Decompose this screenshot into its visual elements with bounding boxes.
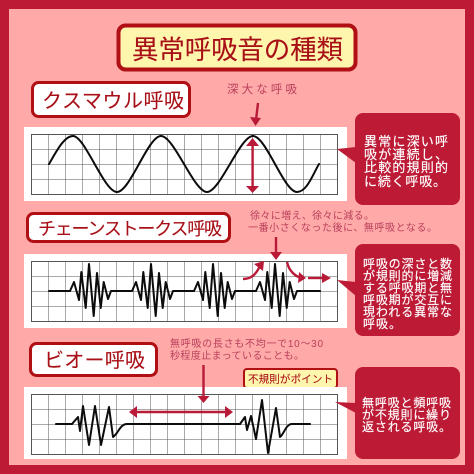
callout: Cheyne-Stokes description: 呼吸期が交互に <box>363 292 452 307</box>
title <box>118 26 356 70</box>
heading: Cheyne-Stokes <box>28 214 230 242</box>
heading: Biot <box>30 344 156 376</box>
callout: Kussmaul description: に続く呼吸。 <box>364 174 446 189</box>
callout: Cheyne-Stokes description: 呼吸。 <box>363 317 401 331</box>
callout: Kussmaul description: 吸が連続し、 <box>364 147 448 162</box>
callout: Cheyne-Stokes description <box>337 244 460 336</box>
arrow: decrescendo <box>287 262 306 283</box>
callout: Cheyne-Stokes description: する呼吸期と無 <box>363 280 452 295</box>
annotation: Cheyne-Stokes note: 徐々に増え、徐々に減る。 <box>250 209 374 222</box>
callout: Biot description: 無呼吸と頻呼吸 <box>362 395 451 410</box>
callout: Cheyne-Stokes description: 呼吸の深さと数 <box>363 256 452 271</box>
annotation: Biot note: 無呼吸の長さも不均一で10〜30 <box>170 337 323 350</box>
arrow: smallest point pointer <box>270 237 282 260</box>
callout: Cheyne-Stokes description: 現われる異常な <box>363 305 452 319</box>
tag: irregularity is the point: 不規則がポイント <box>248 372 333 386</box>
heading: Biot: ビオー呼吸 <box>44 349 145 372</box>
arrow: deep breathing pointer <box>250 103 261 126</box>
arrow: apnea span <box>129 406 233 418</box>
chart: Cheyne-Stokes waveform <box>24 254 347 328</box>
annotation: deep breathing: 深大な呼吸 <box>227 82 298 96</box>
callout: Biot description: が不規則に繰り <box>362 407 451 422</box>
callout: Cheyne-Stokes description: が規則的に増減 <box>363 268 452 283</box>
callout: Kussmaul description <box>337 113 460 205</box>
annotation: Biot note: 秒程度止まっていることも。 <box>170 349 304 362</box>
annotation: Cheyne-Stokes note <box>248 209 437 234</box>
annotation: Biot note <box>170 337 323 362</box>
title: 異常呼吸音の種類 <box>132 35 343 65</box>
heading: Kussmaul: クスマウル呼吸 <box>42 90 184 112</box>
annotation: Cheyne-Stokes note: 一番小さくなった後に、無呼吸となる。 <box>248 221 437 234</box>
arrow: amplitude <box>246 138 259 193</box>
tag: irregularity is the point <box>244 369 337 388</box>
callout: Biot description: 返される呼吸。 <box>362 420 451 434</box>
heading: Kussmaul <box>32 82 190 116</box>
arrow: apnea direction <box>308 273 331 283</box>
arrow: crescendo <box>243 261 264 279</box>
heading: Cheyne-Stokes: チェーンストークス呼吸 <box>38 219 222 239</box>
chart: Kussmaul waveform <box>24 127 347 201</box>
callout: Biot description <box>335 367 460 459</box>
arrow: apnea pointer <box>198 365 210 403</box>
callout: Kussmaul description: 比較的規則的 <box>364 160 448 175</box>
callout: Kussmaul description: 異常に深い呼 <box>364 134 448 149</box>
chart: Biot waveform <box>24 365 347 459</box>
